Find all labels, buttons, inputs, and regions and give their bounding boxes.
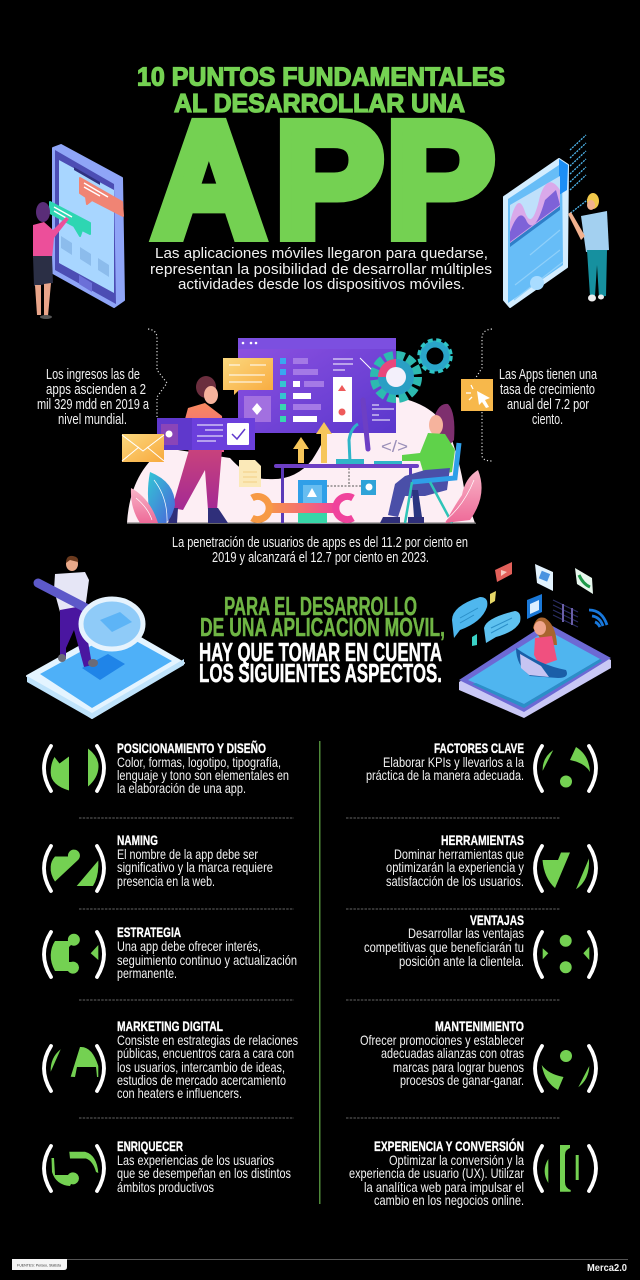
text: marketing digital: con heaters e influencers. bbox=[117, 1085, 242, 1101]
text: estrategia: permanente. bbox=[117, 965, 177, 981]
point 6 bbox=[366, 740, 596, 791]
text: enriquecer: ámbitos productivos bbox=[117, 1179, 214, 1195]
right statistic: Las Apps tienen una bbox=[499, 367, 598, 383]
text: herramientas: optimizarán la experiencia y bbox=[386, 859, 524, 875]
text: ventajas: VENTAJAS bbox=[470, 912, 524, 928]
text: mantenimiento: adecuadas alianzas con otras bbox=[381, 1045, 524, 1061]
text: enriquecer: Las experiencias de los usuarios bbox=[117, 1152, 274, 1168]
man figure bbox=[168, 376, 228, 523]
text: posicionamiento: lenguaje y tono son elementales en bbox=[117, 767, 289, 783]
wrench bbox=[252, 496, 353, 520]
envelope bbox=[122, 434, 164, 462]
point 8 bbox=[364, 912, 596, 977]
point 2 bbox=[44, 832, 273, 891]
text: naming: presencia en la web. bbox=[117, 873, 215, 889]
icon: number 1 bbox=[44, 746, 104, 791]
penetration text: 2019 y alcanzará el 12.7 por ciento en 2023. bbox=[212, 550, 429, 566]
icon: number 8 bbox=[535, 932, 596, 977]
left statistic bbox=[37, 367, 150, 428]
text: marketing digital: públicas, encuentros cara a cara con bbox=[117, 1045, 294, 1061]
heading: development aspects: LOS SIGUIENTES ASPECTOS. bbox=[199, 658, 442, 688]
icon: number 2 bbox=[44, 846, 104, 891]
text: estrategia: Una app debe ofrecer interés, bbox=[117, 938, 261, 954]
icon: number 10 bbox=[535, 1145, 596, 1192]
text: herramientas: HERRAMIENTAS bbox=[441, 832, 524, 848]
title: 10 PUNTOS FUNDAMENTALES bbox=[137, 62, 505, 92]
gears bbox=[375, 340, 451, 398]
point 1 bbox=[44, 739, 289, 796]
text: herramientas: Dominar herramientas que bbox=[394, 846, 524, 862]
heading: development aspects: PARA EL DESARROLLO bbox=[224, 591, 417, 621]
center divider bbox=[319, 741, 320, 1204]
text: ventajas: Desarrollar las ventajas bbox=[408, 925, 524, 941]
plants bbox=[131, 470, 482, 523]
text: estrategia bbox=[117, 924, 297, 981]
text: naming: El nombre de la app debe ser bbox=[117, 846, 258, 862]
text: marketing digital bbox=[117, 1018, 298, 1101]
point 7 bbox=[386, 832, 596, 891]
icon: number 9 bbox=[535, 1046, 596, 1091]
dotted bracket right bbox=[475, 329, 492, 461]
text: estrategia: ESTRATEGIA bbox=[117, 924, 181, 940]
text: experiencia y conversion: Optimizar la conversión y la bbox=[389, 1152, 524, 1168]
right statistic: anual del 7.2 por bbox=[507, 397, 589, 413]
text: enriquecer: ENRIQUECER bbox=[117, 1138, 183, 1154]
chat bubble bbox=[223, 358, 273, 395]
penetration text bbox=[172, 535, 468, 566]
sources label bbox=[12, 1259, 67, 1270]
icon: number 5 bbox=[44, 1146, 104, 1191]
text: mantenimiento bbox=[360, 1018, 524, 1088]
text: ventajas: competitivas que beneficiarán tu bbox=[364, 939, 524, 955]
text: mantenimiento: marcas para lograr buenos bbox=[393, 1059, 524, 1075]
text: posicionamiento: Color, formas, logotipo, tipografía, bbox=[117, 754, 281, 770]
title: A bbox=[153, 88, 265, 271]
text: experiencia y conversion: EXPERIENCIA Y CONVERSIÓN bbox=[374, 1137, 524, 1154]
text: posicionamiento bbox=[117, 739, 289, 796]
footer bbox=[12, 1259, 628, 1274]
text: mantenimiento: procesos de ganar-ganar. bbox=[400, 1072, 524, 1088]
point 3 bbox=[44, 924, 297, 981]
text: experiencia y conversion bbox=[349, 1137, 524, 1208]
illustration: woman with laptop on tablet bbox=[452, 562, 611, 718]
heading: development aspects: HAY QUE TOMAR EN CUENTA bbox=[199, 637, 442, 667]
title: P bbox=[275, 88, 384, 271]
right statistic: ciento. bbox=[532, 412, 563, 428]
illustration: app development team bbox=[122, 338, 493, 524]
text: naming bbox=[117, 832, 273, 889]
point 10 bbox=[349, 1137, 596, 1208]
title bbox=[137, 62, 505, 271]
right statistic bbox=[499, 367, 598, 428]
text: herramientas bbox=[386, 832, 524, 889]
right statistic: tasa de crecimiento bbox=[500, 382, 595, 398]
text: herramientas: satisfacción de los usuarios. bbox=[386, 873, 524, 889]
penetration text: La penetración de usuarios de apps es del 11.2 por ciento en bbox=[172, 535, 468, 551]
text: factores clave: práctica de la manera adecuada. bbox=[366, 767, 524, 783]
text: experiencia y conversion: experiencia de usuario (UX). Utilizar bbox=[349, 1165, 524, 1181]
text: marketing digital: estudios de mercado acercamiento bbox=[117, 1072, 286, 1088]
point 5 bbox=[44, 1138, 291, 1195]
illustration: man with tablet bbox=[504, 135, 609, 307]
text: naming: significativo y la marca requiere bbox=[117, 859, 273, 875]
text: posicionamiento: la elaboración de una app. bbox=[117, 780, 246, 796]
text: posicionamiento: POSICIONAMIENTO Y DISEÑO bbox=[117, 739, 266, 756]
left statistic: apps ascienden a 2 bbox=[46, 382, 146, 398]
heading: development aspects: DE UNA APLICACION MOVIL, bbox=[200, 612, 445, 642]
desk and screen: </> bbox=[381, 437, 408, 456]
cursor icon bbox=[461, 379, 493, 411]
logo: Merca2.0 bbox=[587, 1262, 627, 1274]
text: naming: NAMING bbox=[117, 832, 158, 848]
heading: development aspects bbox=[199, 591, 445, 688]
icon: number 6 bbox=[535, 746, 596, 791]
left statistic: mil 329 mdd en 2019 a bbox=[37, 397, 150, 413]
text: estrategia: seguimiento continuo y actualización bbox=[117, 952, 297, 968]
icon: number 4 bbox=[44, 1046, 104, 1091]
point 4 bbox=[44, 1018, 298, 1101]
intro text bbox=[150, 245, 492, 293]
desk and screen bbox=[274, 400, 419, 523]
text: experiencia y conversion: cambio en los negocios online. bbox=[374, 1192, 524, 1208]
document bbox=[239, 460, 261, 487]
arrows bbox=[293, 422, 332, 463]
illustration: man with magnifier on tablet bbox=[27, 556, 184, 719]
text: factores clave: FACTORES CLAVE bbox=[434, 740, 524, 756]
illustration: woman with phone bbox=[33, 145, 124, 319]
sources label: FUENTES: Perseo, Statista bbox=[17, 1262, 62, 1268]
title: P bbox=[386, 88, 495, 271]
dotted bracket left bbox=[148, 329, 167, 418]
point 9 bbox=[360, 1018, 596, 1091]
left statistic: Los ingresos las de bbox=[46, 367, 140, 383]
icon: number 7 bbox=[535, 846, 596, 891]
intro text: representan la posibilidad de desarrollar múltiples bbox=[150, 261, 492, 278]
app window bbox=[238, 338, 396, 433]
text: mantenimiento: MANTENIMIENTO bbox=[435, 1018, 524, 1034]
text: experiencia y conversion: la analítica web para impulsar el bbox=[364, 1179, 524, 1195]
icon: number 3 bbox=[44, 932, 104, 977]
text: marketing digital: Consiste en estrategias de relaciones bbox=[117, 1032, 298, 1048]
text: marketing digital: los usuarios, intercambio de ideas, bbox=[117, 1059, 285, 1075]
text: enriquecer bbox=[117, 1138, 291, 1195]
intro text: actividades desde los dispositivos móviles. bbox=[178, 276, 465, 293]
intro text: Las aplicaciones móviles llegaron para quedarse, bbox=[155, 245, 488, 262]
text: marketing digital: MARKETING DIGITAL bbox=[117, 1018, 223, 1034]
left statistic: nivel mundial. bbox=[58, 412, 127, 428]
text: mantenimiento: Ofrecer promociones y establecer bbox=[360, 1032, 524, 1048]
text: factores clave bbox=[366, 740, 524, 783]
text: ventajas: posición ante la clientela. bbox=[399, 953, 524, 969]
text: enriquecer: que se desempeñan en los distintos bbox=[117, 1165, 291, 1181]
text: factores clave: Elaborar KPIs y llevarlos a la bbox=[383, 754, 524, 770]
title: AL DESARROLLAR UNA bbox=[174, 88, 465, 118]
purple card bbox=[157, 418, 255, 450]
woman figure bbox=[380, 404, 459, 523]
text: ventajas bbox=[364, 912, 524, 969]
